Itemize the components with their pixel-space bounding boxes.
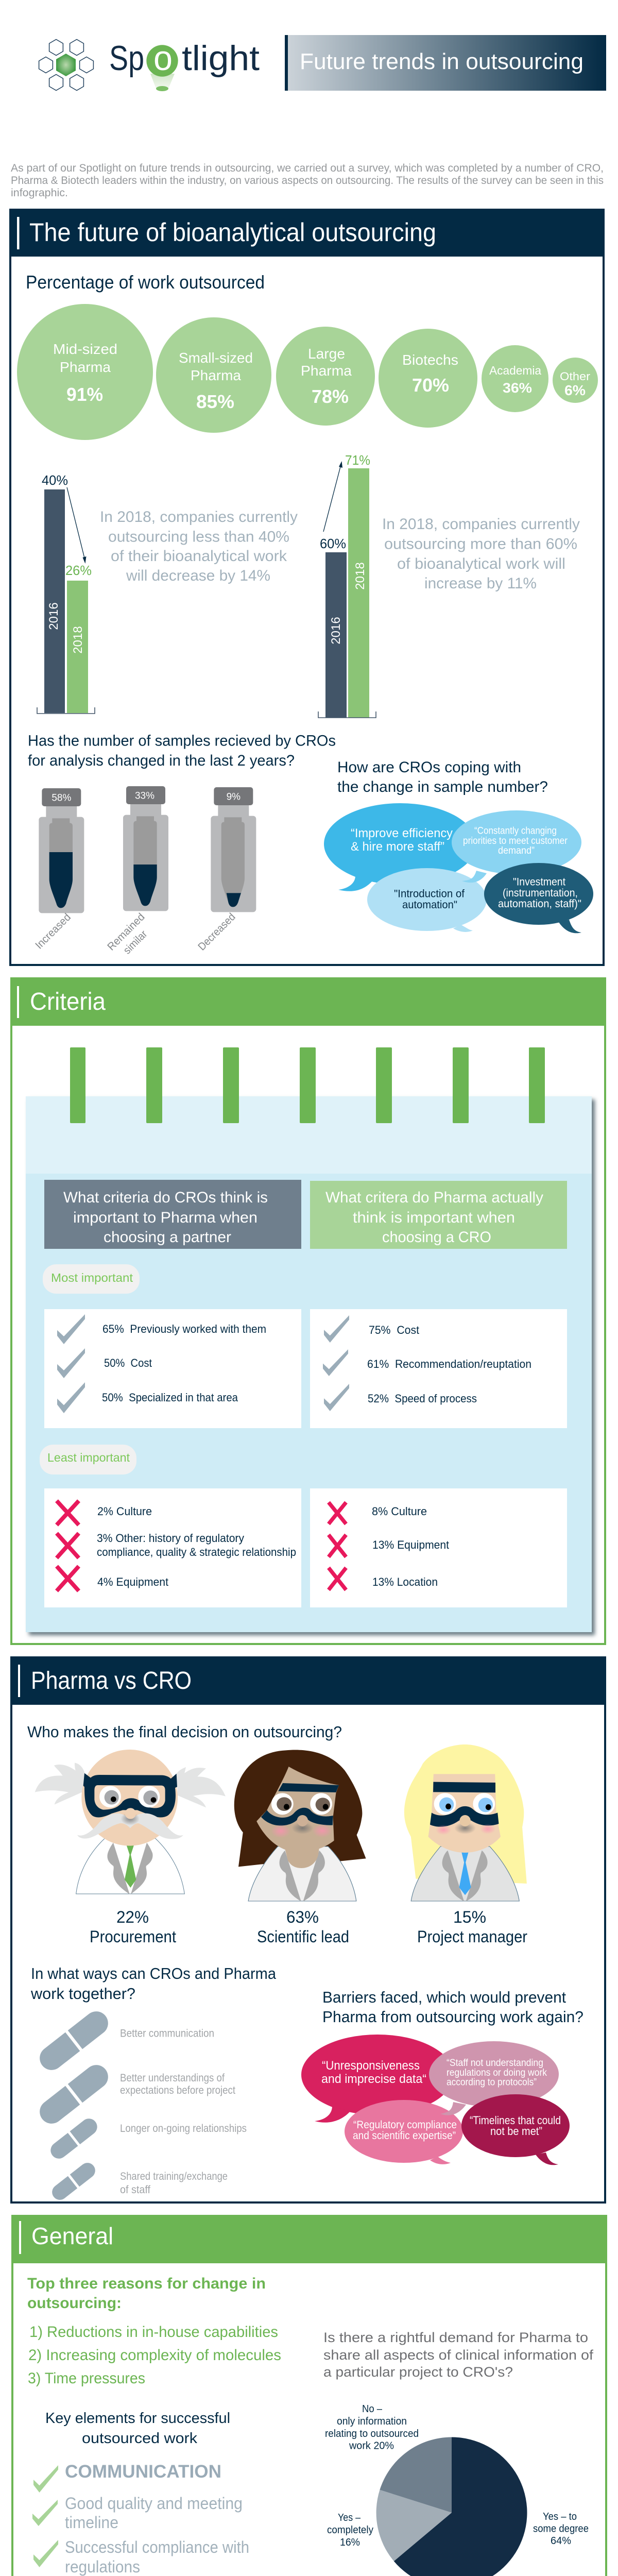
pie chart: clinical information: some degree <box>533 2523 589 2535</box>
column header: CROs think: important to Pharma when <box>73 1209 258 1226</box>
panel: criteria <box>10 977 606 1644</box>
text block: increase by 11%: increase by 11% <box>424 575 537 592</box>
logo wordmark: Sp <box>109 39 144 78</box>
speech bubbles: CRO coping <box>324 803 593 933</box>
intro text: Pharma & Biotecth leaders within the industry, on various aspects on outsourcing. The results of the survey can be seen in this <box>11 175 604 187</box>
heading: rightful demand question: share all aspects of clinical information of <box>323 2347 594 2363</box>
heading: samples question: for analysis changed in the last 2 years? <box>28 752 295 769</box>
title banner <box>285 35 606 91</box>
column header: CROs think: choosing a partner <box>104 1229 231 1246</box>
bubble chart: percentage outsourced: Pharma <box>60 359 111 375</box>
column header: Pharma think: think is important when <box>353 1209 515 1226</box>
heading: key elements: Key elements for successful <box>45 2410 230 2427</box>
stat labels: decision makers: Procurement <box>90 1927 176 1946</box>
vial labels <box>33 911 238 957</box>
bubble: improve efficiency <box>324 803 476 891</box>
list: CROs least important: compliance, quality & strategic relationship <box>97 1546 296 1558</box>
list: Pharma most important: 61% Recommendation/reuptation <box>367 1358 531 1370</box>
panel: the future of bioanalytical outsourcing <box>9 209 605 965</box>
bubble chart: percentage outsourced: 70% <box>412 375 449 396</box>
text block: increase by 11%: In 2018, companies currently <box>382 516 580 533</box>
pie chart: clinical information: relating to outsourced <box>325 2428 419 2439</box>
panel: general <box>11 2215 607 2576</box>
logo wordmark: o <box>153 39 173 78</box>
bubble: introduction of automation <box>367 868 487 932</box>
bubble: staff not understanding: “Staff not understanding <box>447 2058 543 2069</box>
bubble chart: percentage outsourced: Pharma <box>301 363 352 379</box>
intro text <box>11 162 604 199</box>
vial: remained similar: 33% <box>135 790 154 801</box>
pie chart: clinical information: work 20% <box>349 2440 394 2451</box>
list: Pharma most important: 52% Speed of process <box>368 1392 477 1405</box>
bubble chart: percentage outsourced: Large <box>308 346 345 362</box>
bubble: investment: (instrumentation, <box>503 887 578 899</box>
list: pill icons: of staff <box>120 2184 150 2196</box>
list: CROs most important <box>44 1309 301 1428</box>
pie chart: clinical information: 64% <box>551 2535 571 2547</box>
arrow: increase <box>323 461 342 532</box>
heading: rightful demand question: a particular project to CRO's? <box>323 2364 513 2380</box>
bar chart: under 40% decrease <box>37 472 95 714</box>
pie chart: clinical information: only information <box>337 2416 407 2427</box>
bubble: timelines <box>461 2094 570 2165</box>
heading: key elements <box>45 2410 230 2447</box>
column header: CROs think: What criteria do CROs think is <box>63 1189 268 1206</box>
pie chart: clinical information: completely <box>327 2524 373 2536</box>
list: pill icons: expectations before project <box>120 2084 235 2096</box>
list: CROs most important: 50% Specialized in that area <box>102 1391 238 1404</box>
text block: increase by 11%: of bioanalytical work will <box>397 555 565 572</box>
heading: how CROs are coping: How are CROs coping with <box>337 759 521 776</box>
text block: decrease by 14%: of their bioanalytical work <box>111 548 287 565</box>
bubble: timelines: “Timelines that could <box>470 2114 561 2127</box>
pie chart: clinical information: No – <box>362 2403 383 2415</box>
heading: samples question <box>28 733 336 769</box>
stat labels: decision makers: 22% <box>116 1908 149 1926</box>
vial: decreased <box>211 787 256 912</box>
bar chart: under 40% decrease: 2016 <box>47 602 61 630</box>
bubble: introduction of automation: "Introduction of <box>394 888 465 900</box>
label pill: most important: Most important <box>51 1271 133 1284</box>
arrow: decrease <box>67 487 87 564</box>
list: CROs least important: 2% Culture <box>97 1505 152 1518</box>
text block: increase by 11% <box>382 516 580 592</box>
vial: increased <box>39 788 84 913</box>
heading: pharma vs CRO: Pharma vs CRO <box>31 1667 192 1694</box>
bar chart: under 40% decrease: 26% <box>65 563 92 578</box>
bubble chart: percentage outsourced: 36% <box>503 380 532 396</box>
text block: decrease by 14%: will decrease by 14% <box>126 567 270 584</box>
vial: decreased: 9% <box>227 791 241 802</box>
speech bubbles: barriers <box>301 2035 570 2165</box>
heading: working together: work together? <box>30 1985 135 2003</box>
bar chart: over 60% increase: 60% <box>320 536 346 551</box>
bubble: constantly changing priorities: priorities to meet customer <box>463 836 568 846</box>
heading: key elements: outsourced work <box>82 2430 198 2447</box>
logo: Spotlight <box>39 39 260 91</box>
bubble: constantly changing priorities: “Constantly changing <box>474 825 557 837</box>
stat labels: decision makers: Project manager <box>417 1927 527 1946</box>
label pill: least important: Least important <box>47 1451 130 1464</box>
pie chart: clinical information <box>325 2403 589 2576</box>
list: CROs least important: 3% Other: history of regulatory <box>97 1532 244 1545</box>
intro text: As part of our Spotlight on future trends in outsourcing, we carried out a survey, which was completed by a number of CRO, <box>11 162 604 174</box>
vial: remained similar <box>123 786 168 911</box>
heading: samples question: Has the number of samples recieved by CROs <box>28 733 336 749</box>
text block: decrease by 14%: outsourcing less than 40% <box>108 529 289 545</box>
list: Pharma least important <box>310 1488 567 1607</box>
list: pill icons: Shared training/exchange <box>120 2171 228 2182</box>
character: professor (procurement) <box>35 1750 226 1894</box>
logo wordmark: tlight <box>182 39 260 78</box>
bubble: investment: automation, staff)" <box>498 898 581 910</box>
bubble chart: percentage outsourced <box>17 304 598 440</box>
list: three reasons <box>28 2324 281 2387</box>
bubble: regulatory compliance: and scientific expertise” <box>353 2130 456 2142</box>
notepad binder tabs <box>70 1047 545 1123</box>
list: Pharma least important: 13% Equipment <box>372 1538 449 1551</box>
bubble: investment: "Investment <box>513 876 565 888</box>
bubble: timelines: not be met” <box>490 2125 542 2138</box>
bar chart: under 40% decrease: 40% <box>42 472 68 488</box>
column header: Pharma think: What critera do Pharma actually <box>325 1189 543 1206</box>
list: Pharma most important <box>310 1309 567 1428</box>
heading: top three reasons: outsourcing: <box>27 2295 122 2312</box>
vial labels: similar <box>121 928 149 957</box>
character: scientific lead <box>234 1750 366 1902</box>
bar chart: over 60% increase <box>318 452 376 718</box>
list: Pharma most important: 75% Cost <box>369 1324 419 1336</box>
list: CROs most important: 50% Cost <box>104 1357 152 1369</box>
list: pill icons: Better communication <box>120 2028 214 2039</box>
bubble: staff not understanding: according to protocols” <box>447 2077 537 2088</box>
heading: rightful demand question: Is there a rightful demand for Pharma to <box>323 2330 588 2345</box>
icon: hexagon cluster <box>39 39 93 91</box>
heading: how CROs are coping: the change in sample number? <box>337 778 548 795</box>
icon: pill <box>35 2060 113 2129</box>
bar chart: over 60% increase: 2018 <box>353 562 367 590</box>
heading: barriers <box>322 1988 583 2026</box>
heading: future of bioanalytical outsourcing: The future of bioanalytical outsourcing <box>29 218 436 247</box>
icon: pill <box>49 2159 98 2204</box>
bubble: constantly changing priorities <box>452 810 581 883</box>
bubble chart: percentage outsourced: 91% <box>66 384 103 405</box>
icon: spotlight beam <box>146 45 178 91</box>
heading: barriers: Pharma from outsourcing work again? <box>322 2008 583 2026</box>
stat labels: decision makers: 15% <box>453 1908 486 1926</box>
pie chart: clinical information: Yes – to <box>543 2511 577 2522</box>
bubble chart: percentage outsourced: Pharma <box>191 367 241 383</box>
heading: top three reasons <box>27 2275 266 2312</box>
bubble chart: percentage outsourced: Mid-sized <box>53 341 117 357</box>
vial labels: Increased <box>33 911 73 952</box>
notepad <box>26 1047 595 1635</box>
pie chart: clinical information: 16% <box>340 2537 360 2548</box>
text block: decrease by 14% <box>100 509 298 584</box>
column header: Pharma think <box>310 1181 567 1249</box>
bubble: improve efficiency: “Improve efficiency <box>351 826 453 840</box>
bubble: regulatory compliance: “Regulatory compliance <box>353 2119 457 2131</box>
intro text: infographic. <box>11 187 68 199</box>
list: key elements: Successful compliance with <box>65 2538 249 2556</box>
bubble: staff not understanding <box>429 2041 559 2115</box>
pie chart: clinical information: Yes – <box>338 2512 361 2523</box>
bubble chart: percentage outsourced: 85% <box>196 391 234 412</box>
bubble: improve efficiency: & hire more staff” <box>351 840 444 854</box>
heading: working together: In what ways can CROs and Pharma <box>31 1964 277 1982</box>
heading: percentage of work outsourced: Percentage of work outsourced <box>26 272 265 293</box>
heading: who makes the final decision: Who makes the final decision on outsourcing? <box>27 1723 342 1741</box>
heading: how CROs are coping <box>337 759 548 795</box>
vials chart <box>39 786 256 913</box>
bar chart: over 60% increase: 71% <box>345 452 370 468</box>
stat labels: decision makers: 63% <box>286 1908 319 1926</box>
stat labels: decision makers: Scientific lead <box>257 1927 349 1946</box>
bubble: staff not understanding: regulations or doing work <box>447 2067 547 2078</box>
heading: criteria: Criteria <box>30 988 106 1015</box>
bubble chart: percentage outsourced: Small-sized <box>179 350 253 366</box>
list: Pharma least important: 13% Location <box>372 1575 438 1588</box>
text block: decrease by 14%: In 2018, companies currently <box>100 509 298 526</box>
bubble: introduction of automation: automation" <box>402 899 457 911</box>
list: Pharma least important: 8% Culture <box>372 1505 427 1518</box>
list: CROs least important: 4% Equipment <box>97 1575 168 1588</box>
heading: working together <box>30 1964 277 2003</box>
list: CROs most important: 65% Previously worked with them <box>102 1323 266 1335</box>
list: key elements: COMMUNICATION <box>65 2462 221 2482</box>
heading: general: General <box>31 2223 113 2249</box>
list: three reasons: 2) Increasing complexity of molecules <box>28 2347 281 2364</box>
vial: increased: 58% <box>52 792 71 803</box>
list: key elements: regulations <box>65 2557 140 2576</box>
list: pill icons: Better understandings of <box>120 2072 225 2084</box>
list: key elements: timeline <box>65 2513 118 2532</box>
list: pill icons: Longer on-going relationships <box>120 2123 247 2134</box>
vial labels: Remained <box>105 911 147 953</box>
icon: pill <box>47 2115 101 2162</box>
panel: pharma vs CRO <box>10 1656 606 2204</box>
bubble: regulatory compliance <box>345 2100 463 2164</box>
bubble chart: percentage outsourced: Biotechs <box>402 352 458 368</box>
title banner: Future trends in outsourcing <box>300 49 583 74</box>
heading: rightful demand question <box>323 2330 594 2380</box>
bar chart: over 60% increase: 2016 <box>329 617 343 645</box>
heading: barriers: Barriers faced, which would prevent <box>322 1988 566 2006</box>
stat labels: decision makers <box>90 1908 527 1946</box>
list: three reasons: 3) Time pressures <box>28 2370 145 2387</box>
bubble: unresponsiveness: “Unresponsiveness <box>322 2059 420 2073</box>
list: three reasons: 1) Reductions in in-house capabilities <box>29 2324 278 2341</box>
bar chart: under 40% decrease: 2018 <box>71 626 85 654</box>
character: project manager <box>404 1744 527 1902</box>
text block: increase by 11%: outsourcing more than 60% <box>384 536 577 552</box>
list: CROs least important <box>44 1488 301 1607</box>
bubble: unresponsiveness <box>301 2035 454 2123</box>
list: pill icons <box>35 2006 247 2204</box>
heading: top three reasons: Top three reasons for change in <box>27 2275 266 2292</box>
bubble: investment <box>484 863 593 933</box>
column header: CROs think <box>44 1180 301 1249</box>
bubble chart: percentage outsourced: 78% <box>312 386 349 407</box>
vial labels: Decreased <box>196 911 238 953</box>
bubble chart: percentage outsourced: Academia <box>489 364 541 377</box>
bubble: unresponsiveness: and imprecise data“ <box>321 2072 426 2086</box>
bubble: constantly changing priorities: demand” <box>498 845 535 856</box>
list: key elements: Good quality and meeting <box>65 2494 243 2513</box>
icon: pill <box>35 2006 113 2075</box>
list: key elements <box>32 2462 249 2576</box>
column header: Pharma think: choosing a CRO <box>382 1229 491 1246</box>
label pill: least important <box>40 1445 136 1475</box>
bubble chart: percentage outsourced: Other <box>560 370 590 383</box>
label pill: most important <box>43 1264 140 1294</box>
bubble chart: percentage outsourced: 6% <box>564 382 586 398</box>
